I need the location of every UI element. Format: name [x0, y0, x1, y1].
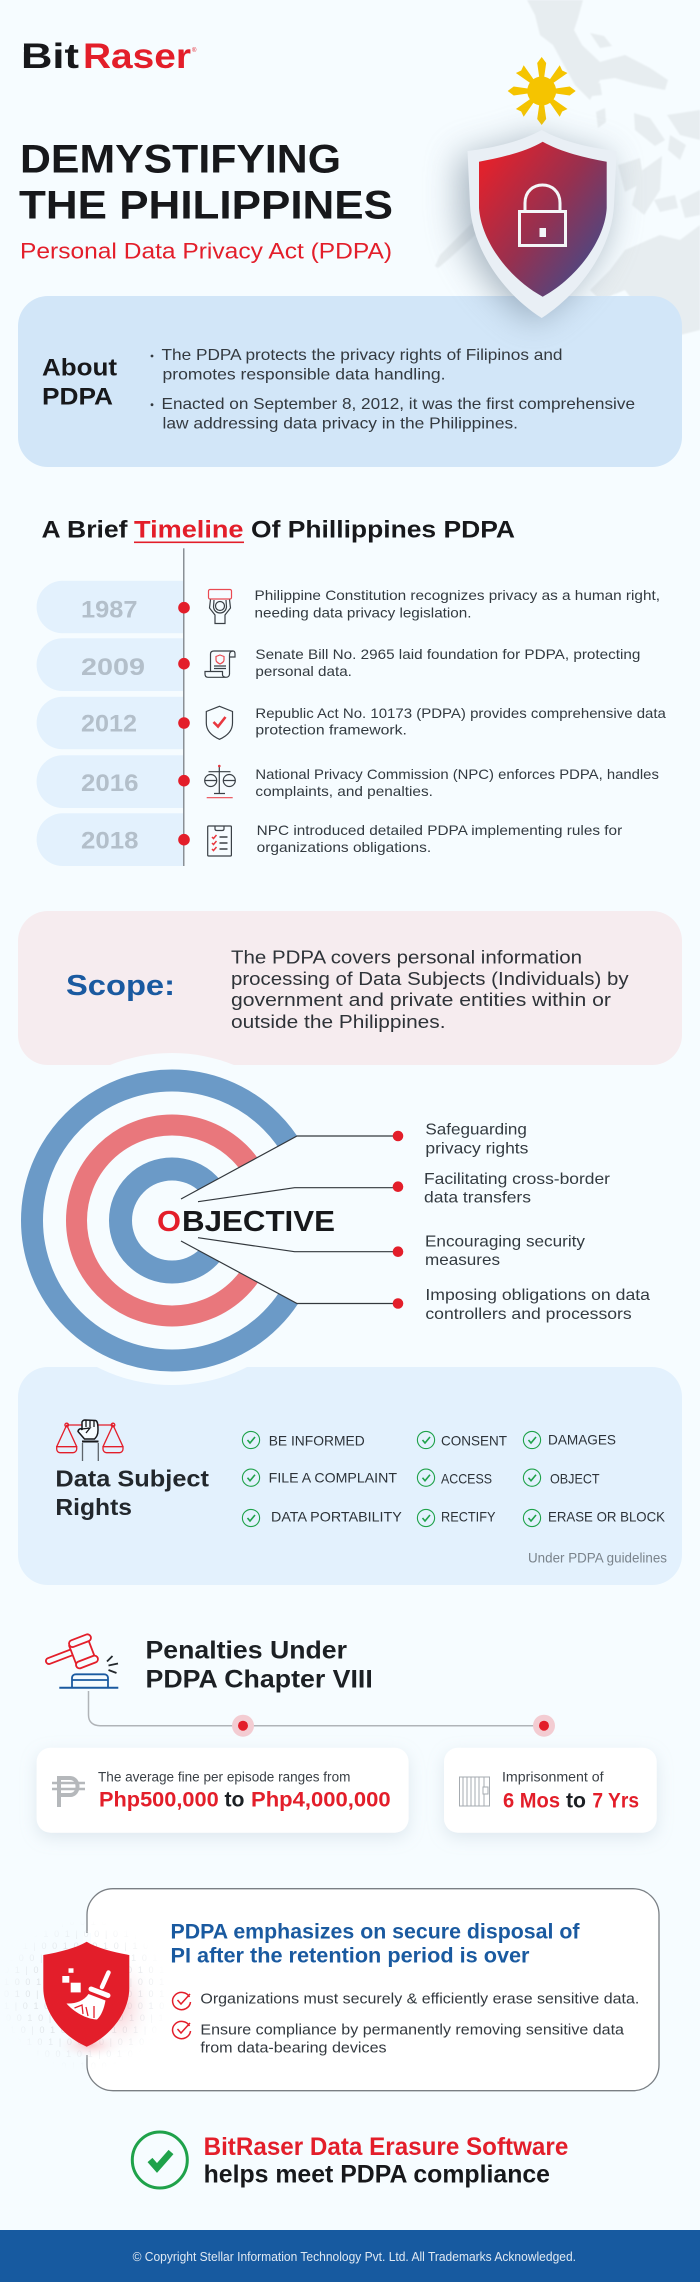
binary pattern: 0 1 0 1 | 0 0 1 0 | 0 1 0 1 0 — [16, 2037, 167, 2047]
logo: BitRaser — [21, 37, 197, 76]
timeline descriptions: NPC introduced detailed PDPA implementing rules for — [257, 822, 623, 838]
objective items — [424, 1121, 650, 1323]
timeline descriptions: complaints, and penalties. — [255, 783, 433, 799]
fine range: to — [224, 1789, 244, 1812]
disposal heading: PDPA emphasizes on secure disposal of — [170, 1920, 581, 1943]
objective items: privacy rights — [425, 1140, 528, 1157]
disposal text: Ensure compliance by permanently removing sensitive data — [200, 2021, 625, 2038]
icon: red shield with broom — [43, 1942, 154, 2059]
icon: fist and scales — [57, 1420, 123, 1461]
call to action: helps meet PDPA compliance — [204, 2160, 550, 2188]
disposal text: Organizations must securely & efficiently erase sensitive data. — [200, 1990, 639, 2007]
binary pattern: 0 1 0 | 1 0 0 1 0 1 | 0 — [40, 2061, 159, 2071]
timeline years: 2009 — [81, 654, 145, 681]
rights list: ERASE OR BLOCK — [548, 1508, 666, 1524]
about bullets: promotes responsible data handling. — [162, 366, 446, 383]
objective dots — [393, 1131, 403, 1309]
panel: fine — [37, 1748, 409, 1833]
rights list: ACCESS — [441, 1470, 492, 1486]
disposal text: from data-bearing devices — [200, 2039, 387, 2056]
binary pattern: 0 1 | 0 0 1 0 1 1 0 | 1 0 — [40, 1917, 170, 1927]
binary pattern: 1 0 0 | 1 0 1 0 1 0 0 | 1 0 1 | 0 — [8, 1953, 178, 1963]
timeline descriptions: protection framework. — [255, 722, 407, 738]
objective target chart — [6, 1053, 403, 1385]
disposal heading — [170, 1920, 581, 1967]
objective connector lines — [181, 1136, 398, 1304]
binary pattern: 0 0 1 0 | 0 1 0 1 | 0 0 1 0 | 1 0 — [6, 2013, 176, 2023]
timeline years: 1987 — [81, 597, 138, 624]
objective label: O — [157, 1206, 181, 1238]
title: DEMYSTIFYING — [20, 138, 341, 182]
timeline years: 2016 — [81, 770, 138, 797]
rights list: DAMAGES — [548, 1431, 616, 1447]
timeline descriptions — [254, 587, 666, 855]
icon: shield with lock — [459, 130, 617, 322]
objective items: Imposing obligations on data — [425, 1287, 650, 1304]
imprisonment range: 7 Yrs — [592, 1790, 639, 1813]
disposal heading: PI after the retention period is over — [170, 1944, 530, 1967]
scope text: government and private entities within or — [231, 990, 611, 1010]
logo: BitRaser: Bit — [21, 37, 79, 76]
objective items: controllers and processors — [425, 1306, 632, 1323]
heading: about: PDPA — [42, 384, 113, 410]
call to action — [204, 2133, 568, 2188]
rights list: BE INFORMED — [269, 1432, 365, 1448]
objective items: Safeguarding — [425, 1121, 527, 1138]
panel: data subject rights — [18, 1367, 682, 1585]
imprisonment text: Imprisonment of — [502, 1770, 604, 1785]
heading: data subject rights: Rights — [55, 1494, 132, 1520]
timeline years — [81, 597, 145, 855]
heading: penalties: PDPA Chapter VIII — [146, 1666, 373, 1694]
rights check icons — [242, 1431, 541, 1527]
scope text: processing of Data Subjects (Individuals) by — [231, 969, 629, 989]
timeline years: 2018 — [81, 828, 138, 855]
binary pattern — [15, 1930, 162, 2059]
icon: scroll bill — [205, 651, 235, 677]
about bullets — [151, 347, 635, 432]
icon: jail bars — [460, 1777, 490, 1806]
scope heading: Scope: — [66, 970, 175, 1002]
heading: data subject rights: Data Subject — [55, 1466, 209, 1492]
about bullets: Enacted on September 8, 2012, it was the first comprehensive — [162, 396, 635, 413]
imprisonment range — [503, 1790, 639, 1813]
heading: penalties: Penalties Under — [146, 1636, 347, 1664]
fine range: Php4,000,000 — [251, 1789, 391, 1812]
subtitle: Personal Data Privacy Act (PDPA) — [20, 238, 392, 264]
fine range: Php500,000 — [99, 1789, 219, 1812]
map of the Philippines — [435, 0, 700, 335]
panel: scope — [18, 911, 682, 1065]
icon: peso — [52, 1778, 85, 1807]
timeline descriptions: Republic Act No. 10173 (PDPA) provides comprehensive data — [255, 705, 666, 721]
rights list — [269, 1431, 666, 1524]
icon: gavel — [45, 1633, 118, 1688]
scope text: outside the Philippines. — [231, 1012, 446, 1032]
imprisonment range: to — [566, 1790, 586, 1813]
heading: data subject rights — [55, 1466, 209, 1520]
binary pattern: 1 | 0 0 1 0 1 | 0 1 0 0 1 0 — [26, 2049, 166, 2059]
heading: timeline — [42, 517, 515, 544]
heading: timeline: A Brief — [42, 517, 129, 544]
panel: about PDPA — [18, 296, 682, 467]
panel: secure disposal — [83, 1889, 659, 2091]
call to action: BitRaser Data Erasure Software — [204, 2133, 568, 2161]
rights list: OBJECT — [550, 1470, 600, 1486]
timeline descriptions: needing data privacy legislation. — [254, 604, 472, 620]
rights list: FILE A COMPLAINT — [269, 1470, 397, 1486]
binary pattern: 1 | 0 1 0 0 1 0 | 1 0 1 0 0 1 0 1 — [4, 2001, 177, 2011]
scope text: The PDPA covers personal information — [231, 947, 582, 967]
footer: © Copyright Stellar Information Technology Pvt. Ltd. All Trademarks Acknowledged. — [133, 2250, 576, 2264]
disposal check icons — [173, 1992, 190, 2039]
timeline descriptions: Philippine Constitution recognizes privacy as a human right, — [254, 587, 660, 603]
icon: person holding sign — [208, 590, 232, 624]
heading: about — [42, 354, 117, 410]
title — [19, 138, 393, 228]
rights list: CONSENT — [441, 1432, 507, 1448]
heading: penalties — [146, 1636, 373, 1694]
icon: clipboard checklist — [208, 826, 231, 856]
heading: timeline: Timeline — [134, 517, 244, 544]
timeline descriptions: organizations obligations. — [257, 839, 431, 855]
rights footnote: Under PDPA guidelines — [528, 1550, 667, 1566]
icon: green check badge — [132, 2132, 187, 2188]
footer — [0, 2230, 700, 2282]
timeline descriptions: National Privacy Commission (NPC) enforces PDPA, handles — [255, 766, 659, 782]
heading: about: About — [42, 354, 117, 382]
objective items: Facilitating cross-border — [424, 1171, 611, 1188]
timeline axis and dots — [178, 548, 190, 866]
fine range — [99, 1789, 391, 1812]
fine text: The average fine per episode ranges from — [98, 1770, 350, 1785]
logo: BitRaser: Raser — [83, 37, 191, 76]
timeline descriptions: personal data. — [255, 663, 352, 679]
binary pattern: 1 0 | 0 1 0 1 0 0 | 1 0 1 | 0 0 1 — [10, 2025, 180, 2035]
logo: BitRaser: ® — [192, 47, 197, 54]
rights list: RECTIFY — [441, 1508, 496, 1524]
title: THE PHILIPPINES — [19, 184, 393, 228]
binary pattern: 0 1 | 0 0 1 0 | 0 1 0 | 1 0 0 1 0 — [12, 1941, 182, 1951]
icon: philippine sun — [508, 57, 576, 125]
objective items: data transfers — [424, 1190, 531, 1207]
binary pattern: 1 0 0 1 0 | 1 0 0 1 0 1 | 0 0 1 0 — [4, 1977, 177, 1987]
scope text — [231, 947, 629, 1032]
heading: timeline: Of Phillippines PDPA — [251, 517, 515, 544]
binary pattern: 0 1 0 | 1 0 0 1 0 1 | 0 0 1 0 1 | — [4, 1989, 174, 1999]
timeline years: 2012 — [81, 711, 137, 738]
disposal text — [200, 1990, 639, 2056]
objective items: Encouraging security — [425, 1234, 585, 1251]
imprisonment range: 6 Mos — [503, 1790, 560, 1813]
about bullets: law addressing data privacy in the Philippines. — [162, 415, 518, 432]
timeline year pills — [37, 581, 183, 866]
panel: imprisonment — [444, 1748, 657, 1833]
icon: shield check — [206, 706, 232, 739]
objective label: BJECTIVE — [182, 1206, 335, 1238]
binary pattern: 1 0 1 0 1 | 0 0 | 0 1 | 1 0 1 0 | — [22, 1929, 189, 1939]
icon: scales — [205, 765, 235, 798]
objective items: measures — [425, 1252, 500, 1269]
timeline descriptions: Senate Bill No. 2965 laid foundation for PDPA, protecting — [255, 646, 640, 662]
about bullets: The PDPA protects the privacy rights of Filipinos and — [162, 347, 562, 364]
penalties connector — [88, 1691, 555, 1737]
binary pattern: 0 1 | 0 1 0 0 | 1 0 1 0 0 1 0 1 0 — [4, 1965, 177, 1975]
rights list: DATA PORTABILITY — [271, 1508, 402, 1524]
